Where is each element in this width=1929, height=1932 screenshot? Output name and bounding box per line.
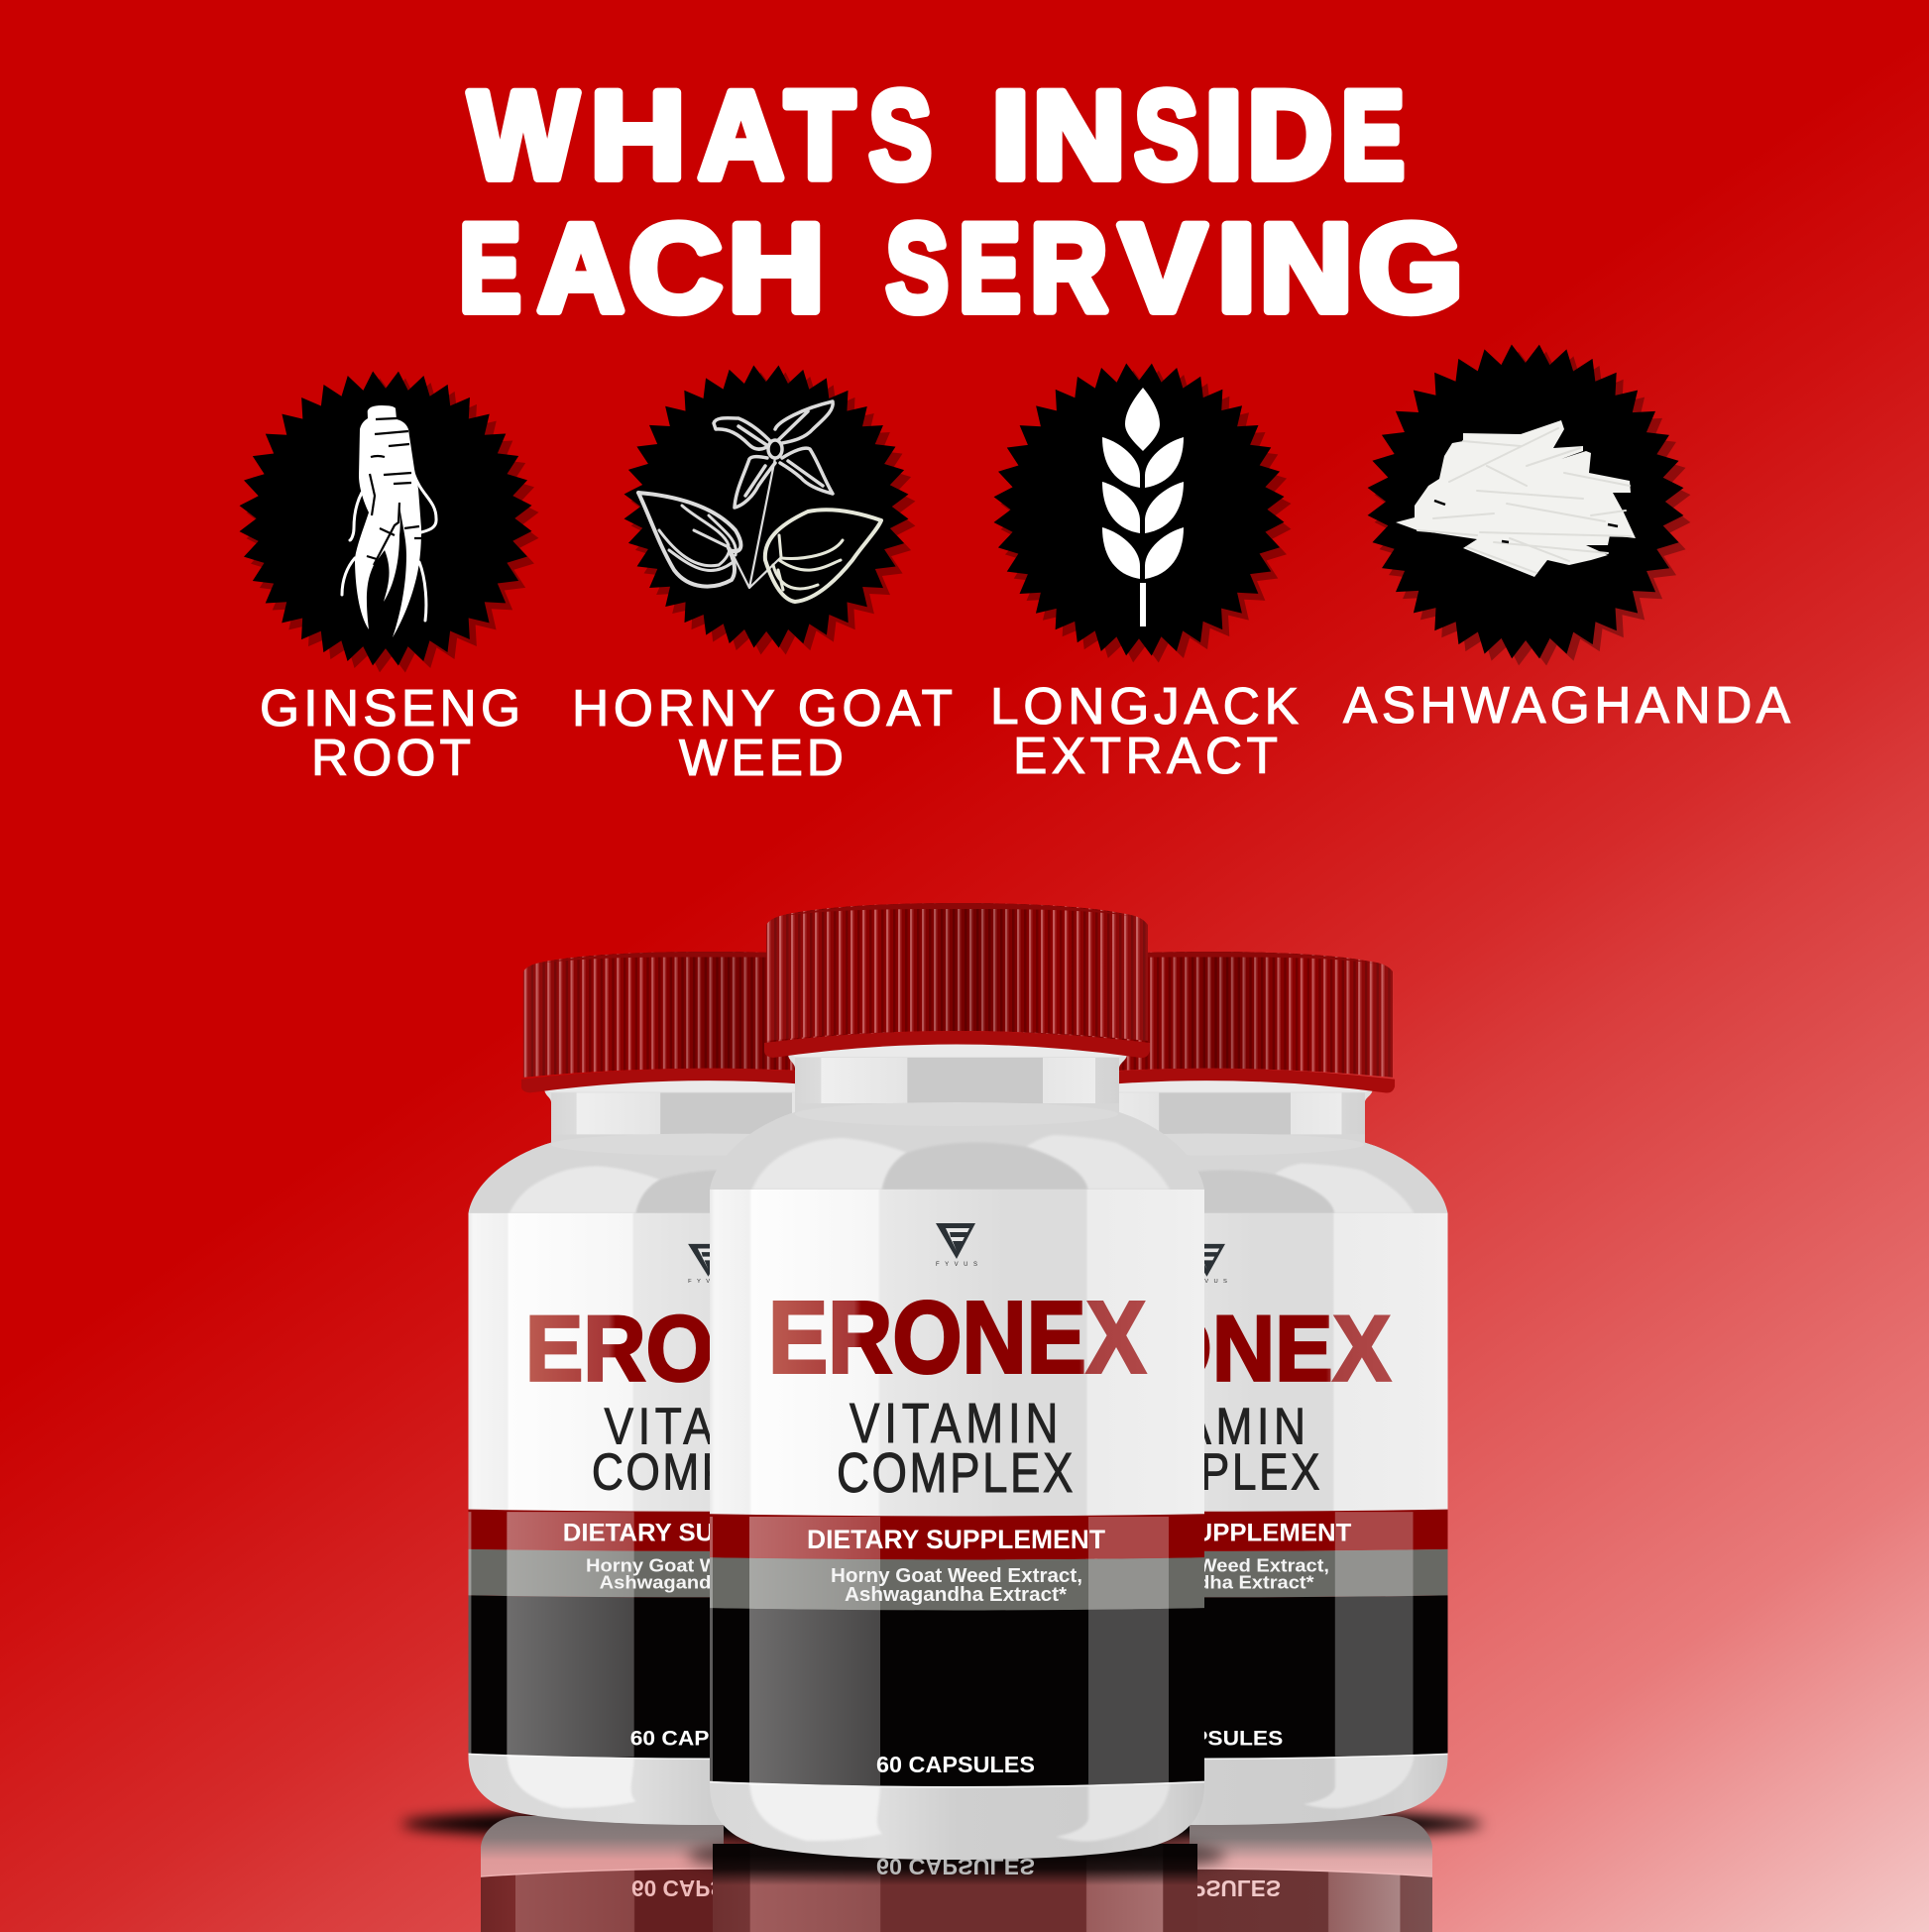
ingredient labels: ROOT bbox=[311, 729, 471, 786]
brand logo bbox=[936, 1223, 977, 1268]
brand logo: FYVUS bbox=[936, 1262, 977, 1268]
title: N bbox=[1033, 65, 1125, 204]
front bottle reflection: 60 CAPSULES bbox=[876, 1854, 1035, 1879]
icon: ginseng root bbox=[342, 405, 436, 637]
title: S bbox=[869, 65, 932, 204]
ingredient labels: EXTRACT bbox=[1013, 727, 1278, 784]
title: E bbox=[959, 198, 1021, 337]
red band bbox=[694, 1514, 1219, 1560]
title: I bbox=[1217, 198, 1256, 337]
panel: longjack extract badge bbox=[981, 351, 1304, 675]
right bottle bbox=[952, 952, 1462, 1838]
band text: DIETARY SUPPLEMENT bbox=[807, 1525, 1105, 1554]
ingredient labels: GINSENG bbox=[260, 679, 520, 737]
white label bbox=[694, 1190, 1219, 1527]
front bottle bbox=[694, 903, 1219, 1874]
title: G bbox=[1359, 198, 1463, 337]
cap bbox=[764, 903, 1150, 1058]
icon: ashwagandha root sticks bbox=[1396, 420, 1636, 577]
left bottle bbox=[453, 952, 964, 1838]
gray band bbox=[694, 1557, 1219, 1610]
title: A bbox=[698, 65, 783, 204]
title: E bbox=[1341, 65, 1405, 204]
right bottle reflection bbox=[1127, 1816, 1432, 1932]
ingredient labels bbox=[260, 676, 1791, 786]
title: C bbox=[628, 198, 722, 337]
front bottle reflection bbox=[687, 1834, 1226, 1932]
neck and body bbox=[694, 1031, 1219, 1874]
icon: flower and leaves bbox=[638, 401, 881, 602]
product name: VITAMIN bbox=[850, 1391, 1058, 1454]
icon: wheat stalk bbox=[1102, 388, 1184, 626]
panel: ashwaghanda badge bbox=[1354, 331, 1704, 679]
title: H bbox=[728, 198, 825, 337]
title: V bbox=[1120, 198, 1205, 337]
black band bbox=[694, 1608, 1219, 1786]
band text: 60 CAPSULES bbox=[876, 1752, 1035, 1777]
title: I bbox=[991, 65, 1030, 204]
lower white base bbox=[694, 1774, 1219, 1874]
title: I bbox=[1204, 65, 1243, 204]
brand name: ERONEX bbox=[768, 1281, 1146, 1394]
title: W bbox=[469, 65, 578, 204]
panel: horny goat weed badge bbox=[612, 353, 928, 667]
gloss highlights bbox=[710, 1517, 1169, 1785]
title: S bbox=[1135, 65, 1198, 204]
title bbox=[459, 65, 1463, 337]
band text: Ashwagandha Extract* bbox=[845, 1584, 1067, 1606]
floor shadow bbox=[401, 1805, 1482, 1843]
ingredient labels: HORNY GOAT bbox=[572, 679, 953, 737]
left bottle reflection bbox=[481, 1816, 785, 1932]
product name: COMPLEX bbox=[837, 1440, 1073, 1504]
title: T bbox=[785, 65, 854, 204]
title: S bbox=[886, 198, 949, 337]
product name bbox=[837, 1391, 1073, 1504]
title: D bbox=[1248, 65, 1332, 204]
title: R bbox=[1030, 198, 1107, 337]
ingredient labels: WEED bbox=[679, 729, 844, 786]
title: H bbox=[591, 65, 685, 204]
band text bbox=[807, 1525, 1105, 1777]
panel: ginseng root badge bbox=[227, 359, 551, 685]
title: A bbox=[537, 198, 624, 337]
left bottle reflection: 60 CAPSULES bbox=[631, 1875, 785, 1901]
title: E bbox=[459, 198, 521, 337]
band text: Horny Goat Weed Extract, bbox=[831, 1565, 1082, 1587]
ingredient labels: LONGJACK bbox=[990, 677, 1299, 735]
right bottle reflection: 60 CAPSULES bbox=[1127, 1875, 1281, 1901]
title: N bbox=[1260, 198, 1352, 337]
ingredient labels: ASHWAGHANDA bbox=[1343, 676, 1791, 734]
